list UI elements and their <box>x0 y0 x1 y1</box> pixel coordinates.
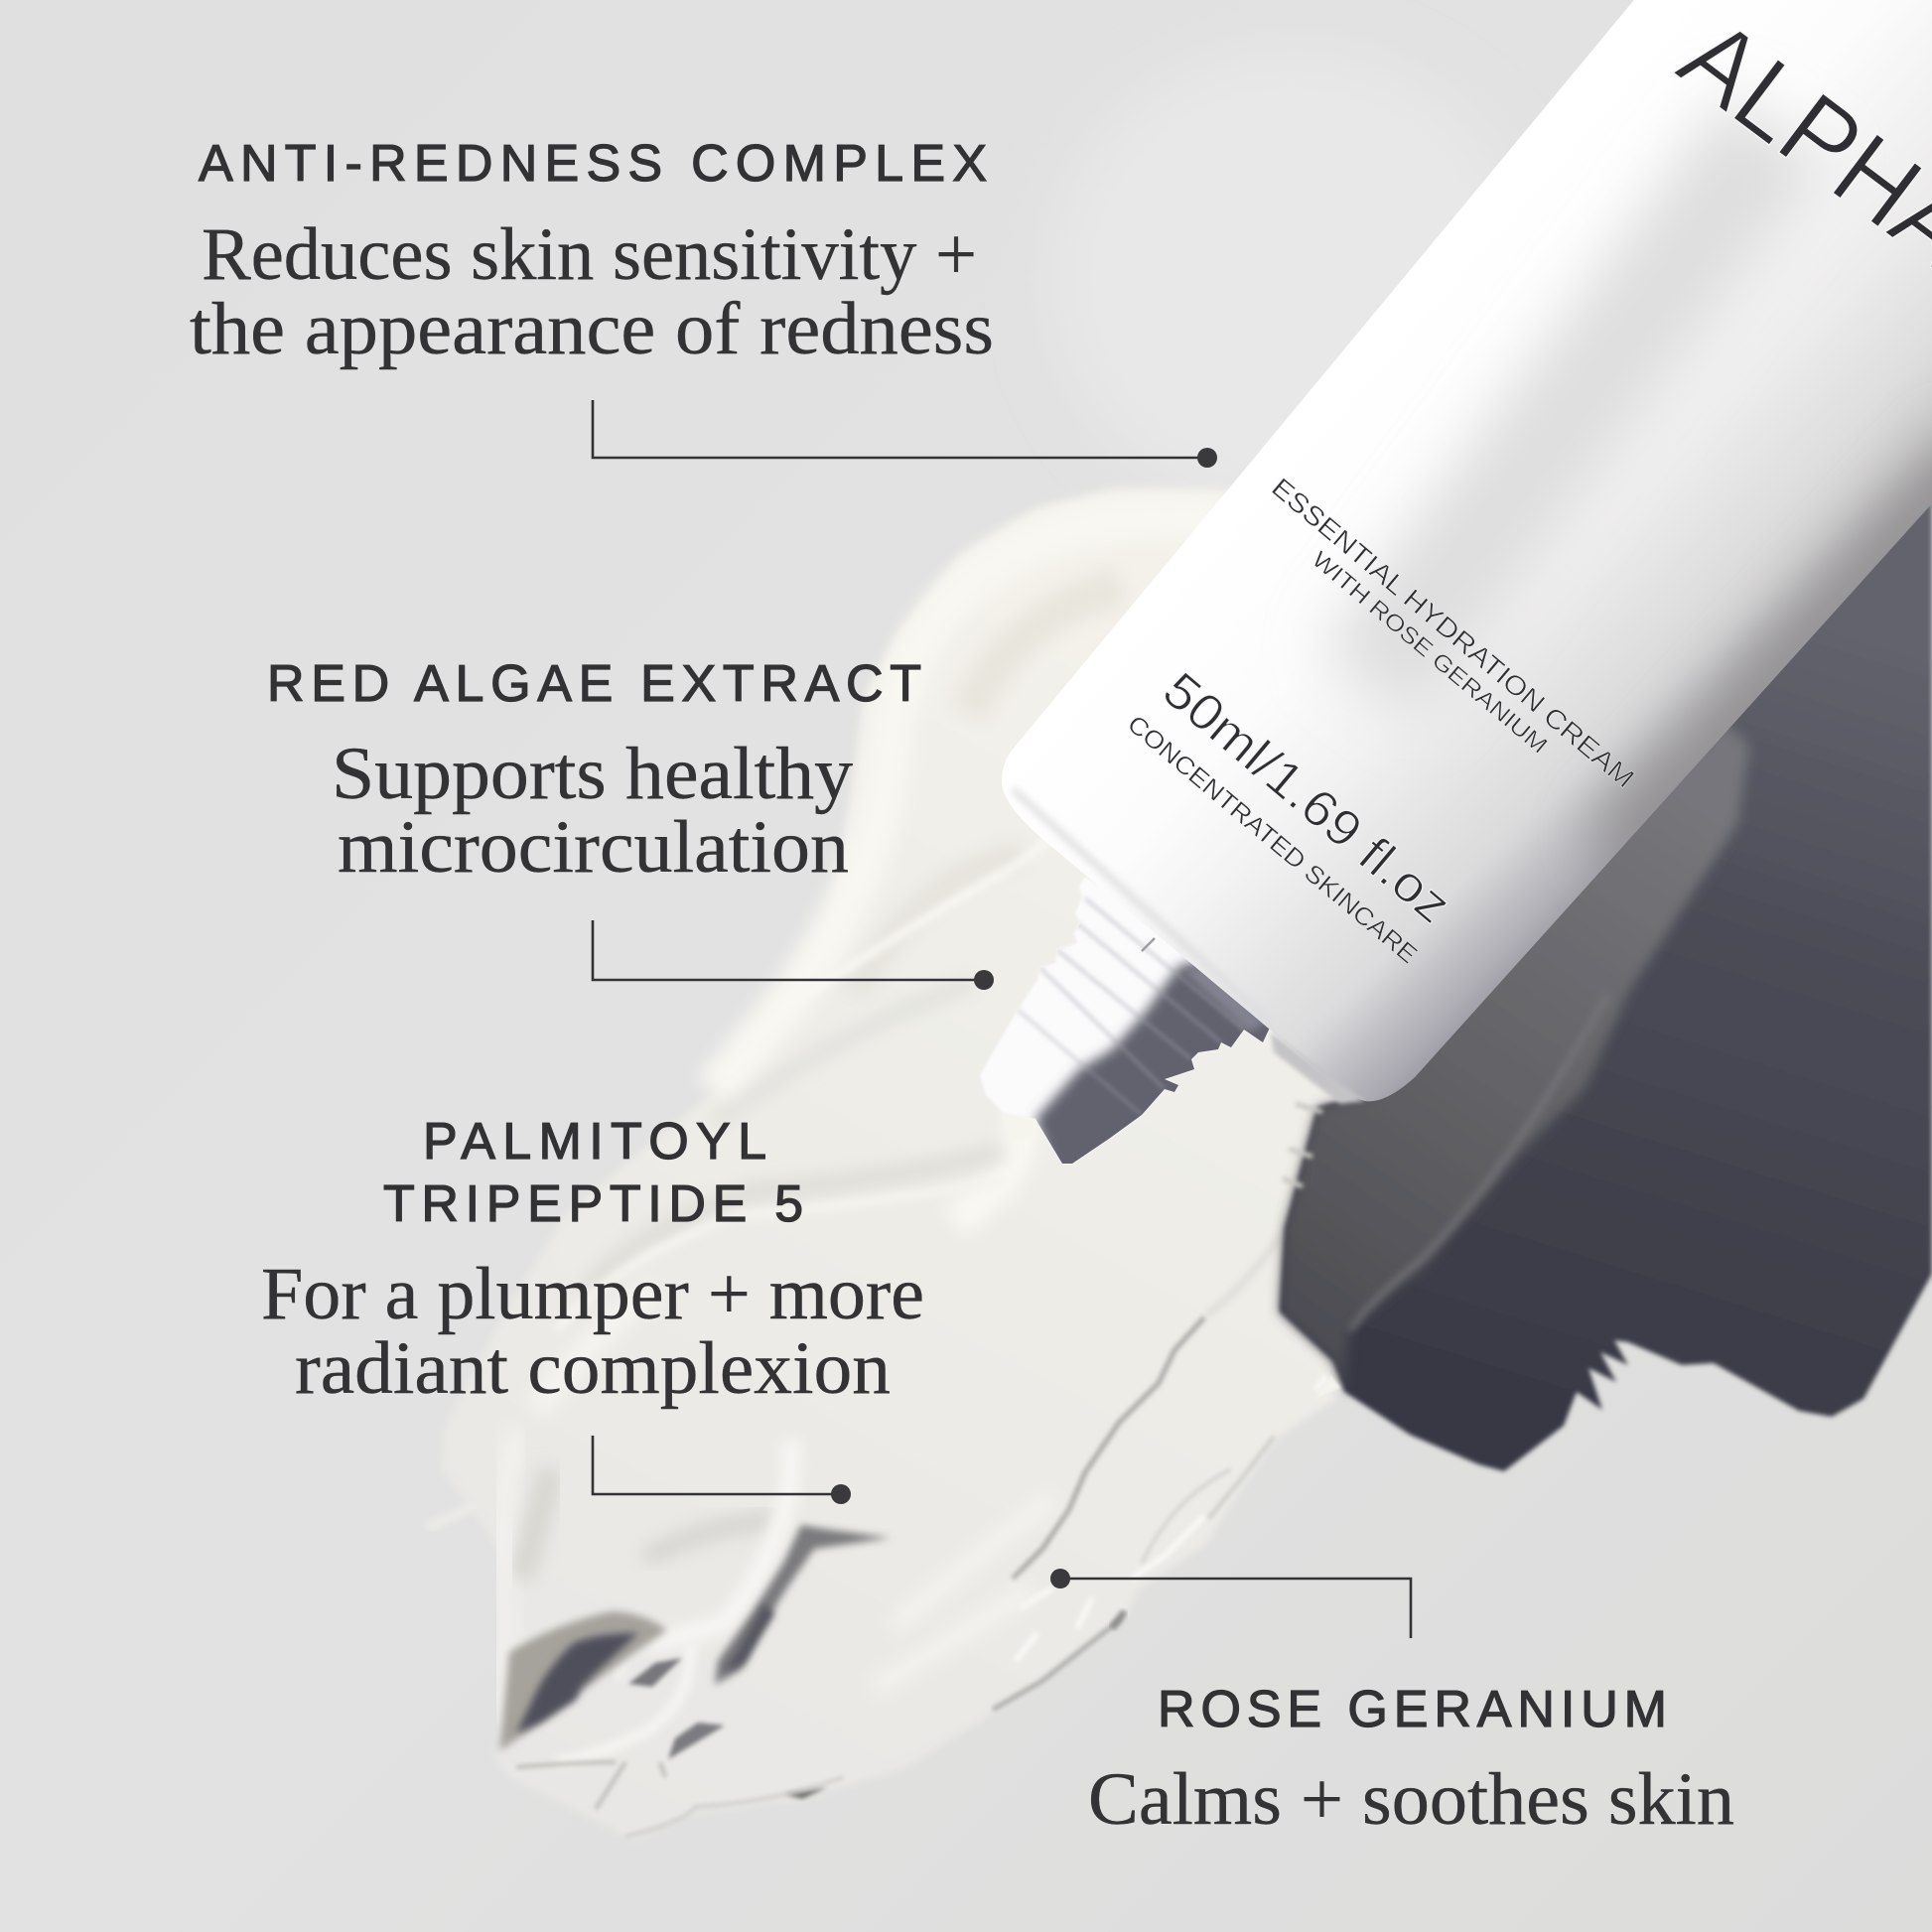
connector <box>1050 1569 1411 1638</box>
connector <box>593 400 1217 468</box>
description: Supports healthy <box>332 733 854 815</box>
callout: anti-redness complex <box>190 135 1217 468</box>
tube product name: ESSENTIAL HYDRATION CREAM <box>1266 473 1640 793</box>
heading: ANTI-REDNESS COMPLEX <box>199 135 987 193</box>
description: radiant complexion <box>295 1327 891 1410</box>
callout: red algae extract <box>267 655 994 990</box>
tube descriptor: CONCENTRATED SKINCARE <box>1122 710 1423 969</box>
callout: rose geranium <box>1050 1569 1734 1841</box>
tube volume: 50ml/1.69 fl.oz <box>1153 661 1461 934</box>
description: microcirculation <box>338 806 849 889</box>
heading: PALMITOYL <box>423 1113 766 1171</box>
tube sub-name: WITH ROSE GERANIUM <box>1308 546 1553 759</box>
tube cast shadow <box>1280 496 1932 1471</box>
connector <box>593 920 994 990</box>
connector <box>593 1436 851 1504</box>
upper cream ridge <box>715 517 1231 1092</box>
circular ridge <box>645 1440 791 1643</box>
cream cavity shadows <box>499 1611 667 1751</box>
description: Calms + soothes skin <box>1088 1758 1734 1841</box>
heading: RED ALGAE EXTRACT <box>267 655 921 713</box>
cream inside shadow <box>1280 722 1749 1392</box>
description <box>190 213 994 370</box>
description <box>332 733 854 889</box>
description <box>261 1253 924 1410</box>
cream swatch <box>427 492 1489 1837</box>
description: For a plumper + more <box>261 1253 924 1335</box>
lower right crease lines <box>1013 1317 1204 1579</box>
description: the appearance of redness <box>190 288 994 370</box>
heading: TRIPEPTIDE 5 <box>383 1175 803 1233</box>
nozzle shaded side <box>1029 956 1269 1164</box>
heading <box>383 1113 803 1233</box>
heading: ROSE GERANIUM <box>1158 1681 1667 1738</box>
nozzle <box>980 878 1269 1164</box>
tube body <box>1002 0 1932 1104</box>
callout: palmitoyl tripeptide 5 <box>261 1113 924 1504</box>
product tip <box>1003 1114 1035 1142</box>
description: Reduces skin sensitivity + <box>202 213 977 296</box>
mid cream folds <box>586 1152 1003 1291</box>
